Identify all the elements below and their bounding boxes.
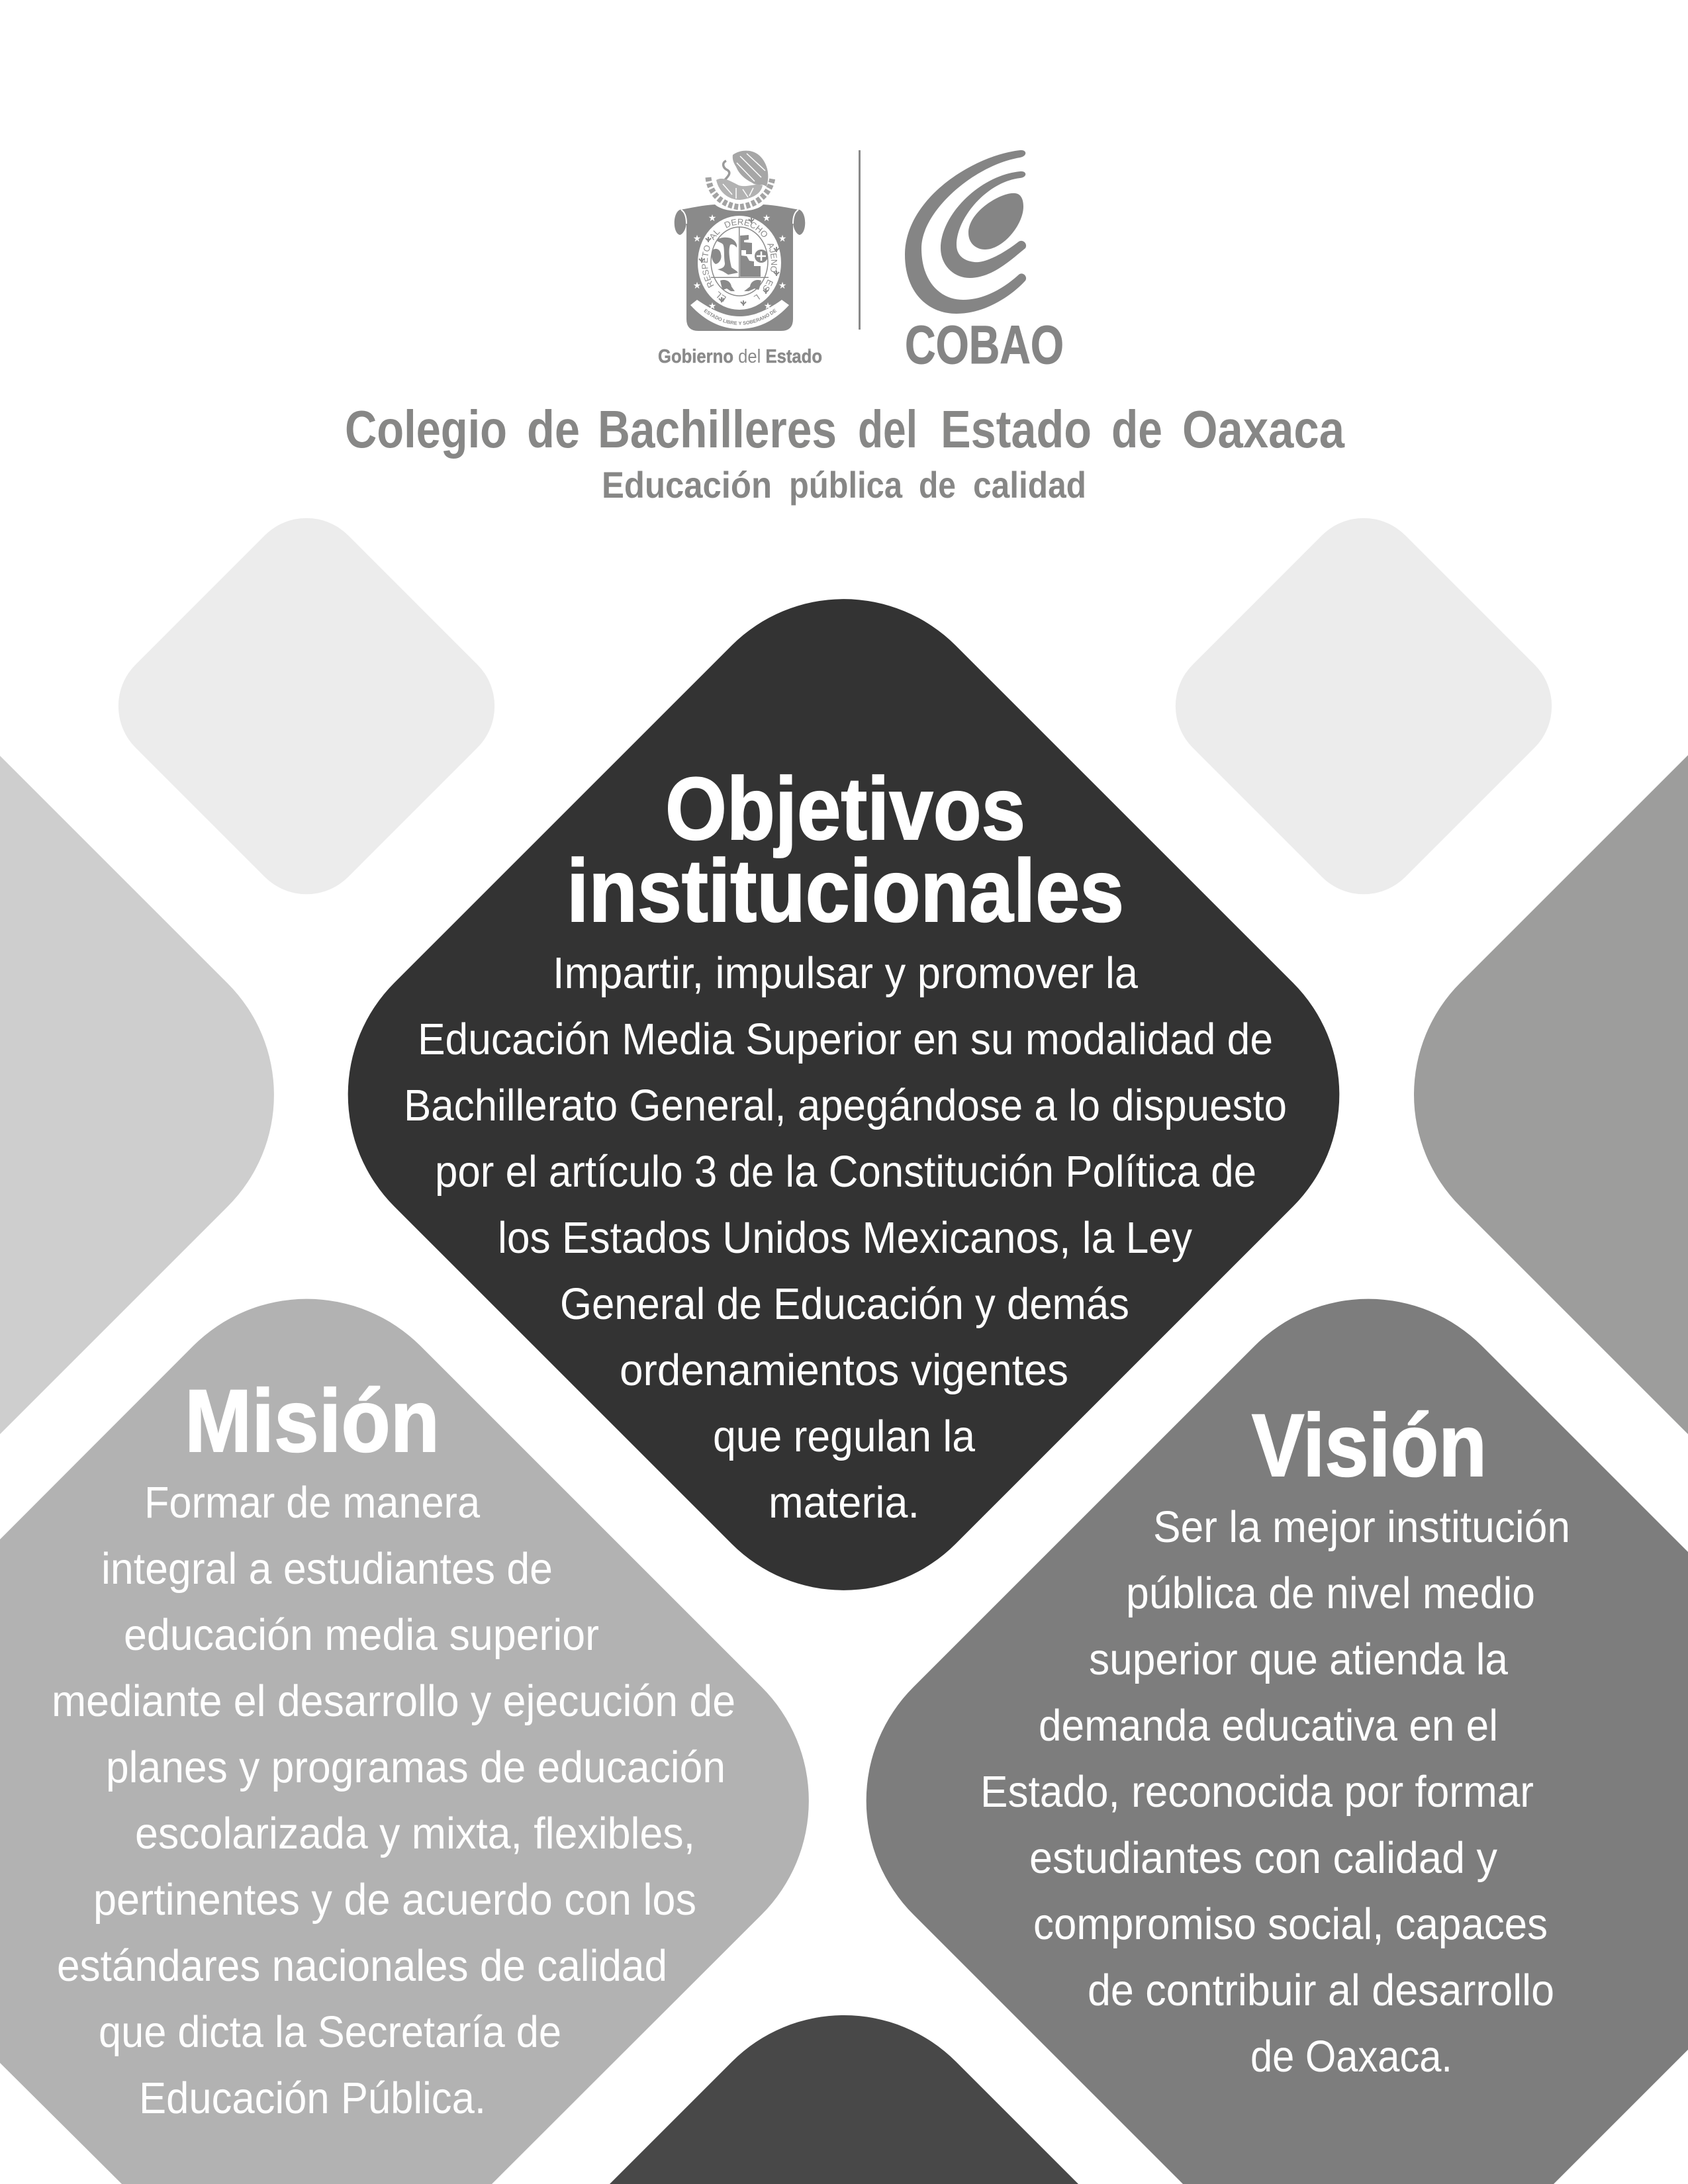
body text: Estado, reconocida por formar (980, 1767, 1534, 1817)
label: COBAO: COBAO (905, 315, 1064, 375)
title (345, 400, 1344, 459)
divider (859, 150, 861, 330)
icon: stars: ★ (764, 301, 772, 312)
decorative diamond: top left (94, 494, 519, 919)
icon: stars: ★ (778, 281, 786, 291)
decorative diamond: right edge (1414, 755, 1688, 1434)
icon: stars: ★ (693, 234, 701, 244)
body text: pertinentes y de acuerdo con los (93, 1875, 696, 1925)
heading: Visión (1252, 1396, 1487, 1495)
body text: que regulan la (713, 1412, 976, 1461)
ribbon (690, 300, 789, 329)
title: Estado (941, 400, 1092, 459)
panel shape (0, 1299, 809, 2184)
body text: los Estados Unidos Mexicanos, la Ley (498, 1213, 1192, 1263)
body text: Educación Pública. (139, 2073, 486, 2123)
icon: stars: ★ (708, 301, 716, 312)
panel: Misión (0, 1299, 809, 2184)
icon: eagle crest (708, 151, 773, 207)
title: Bachilleres (598, 400, 837, 459)
icon: stars: ★ (693, 281, 701, 291)
seal motto: EL RESPETO AL DERECHO AJENO ES LA PAZ (702, 218, 777, 302)
label: Gobierno del Estado: Gobierno del Estado (658, 346, 822, 367)
seal ornaments (699, 218, 779, 306)
body text: Educación Media Superior en su modalidad de (418, 1015, 1273, 1064)
body text (52, 1478, 735, 2123)
body text: de contribuir al desarrollo (1088, 1966, 1554, 2015)
subtitle (602, 464, 1086, 506)
seal ring (698, 216, 781, 310)
body text: Ser la mejor institución (1153, 1502, 1570, 1552)
body text: integral a estudiantes de (101, 1544, 553, 1594)
body text: estándares nacionales de calidad (57, 1941, 667, 1991)
subtitle: calidad (973, 464, 1086, 506)
panel: Objetivos institucionales (283, 533, 1405, 1656)
body text: General de Educación y demás (560, 1279, 1129, 1329)
body text (404, 948, 1287, 1527)
heading: Objetivos (665, 760, 1025, 858)
seal inner oval (711, 227, 768, 296)
title: de (1111, 400, 1162, 459)
subtitle: de (919, 464, 956, 506)
seal quadrants (711, 227, 769, 291)
decorative diamond: bottom centre (610, 2015, 1078, 2184)
subtitle: pública (789, 464, 903, 506)
panel shape (867, 1299, 1688, 2184)
body text: Impartir, impulsar y promover la (553, 948, 1139, 998)
body text: superior que atienda la (1089, 1635, 1509, 1684)
body text: escolarizada y mixta, flexibles, (135, 1809, 695, 1858)
icon: stars: ★ (763, 213, 771, 224)
body text: planes y programas de educación (106, 1743, 726, 1792)
body text: Formar de manera (144, 1478, 481, 1527)
body text: demanda educativa en el (1039, 1701, 1498, 1751)
body text: mediante el desarrollo y ejecución de (52, 1676, 735, 1726)
body text: pública de nivel medio (1126, 1569, 1535, 1618)
icon: stars: ★ (708, 213, 716, 224)
body text: ordenamientos vigentes (620, 1345, 1068, 1395)
title: Oaxaca (1182, 400, 1344, 459)
icon: COBAO swoosh (905, 150, 1026, 314)
decorative diamond: top right (1151, 494, 1576, 919)
body text: Bachillerato General, apegándose a lo dispuesto (404, 1081, 1287, 1130)
subtitle: Educación (602, 464, 772, 506)
heading (567, 760, 1124, 940)
body text: estudiantes con calidad y (1029, 1833, 1497, 1883)
icon: stars (693, 213, 786, 312)
body text (980, 1502, 1570, 2081)
icon: stars: ★ (778, 234, 786, 244)
icon: scroll highlights (681, 210, 798, 224)
body text: que dicta la Secretaría de (99, 2007, 561, 2057)
body text: compromiso social, capaces (1033, 1899, 1548, 1949)
body text: educación media superior (124, 1610, 599, 1660)
panel: Visión (867, 1299, 1688, 2184)
heading: institucionales (567, 842, 1124, 940)
logo: Gobierno del Estado (658, 151, 822, 367)
logo: COBAO (905, 150, 1064, 375)
panel shape (283, 533, 1405, 1656)
decorative diamond: left edge (0, 756, 274, 1434)
body text: por el artículo 3 de la Constitución Política de (435, 1147, 1256, 1197)
seal cross (755, 250, 768, 263)
ribbon text: ESTADO LIBRE Y SOBERANO DE OAXACA (704, 308, 777, 325)
body text: de Oaxaca. (1250, 2032, 1452, 2081)
title: del (858, 400, 917, 459)
heading: Misión (185, 1372, 440, 1471)
title: de (527, 400, 580, 459)
body text: materia. (769, 1478, 919, 1527)
title: Colegio (345, 400, 507, 459)
icon: shield (675, 205, 805, 331)
